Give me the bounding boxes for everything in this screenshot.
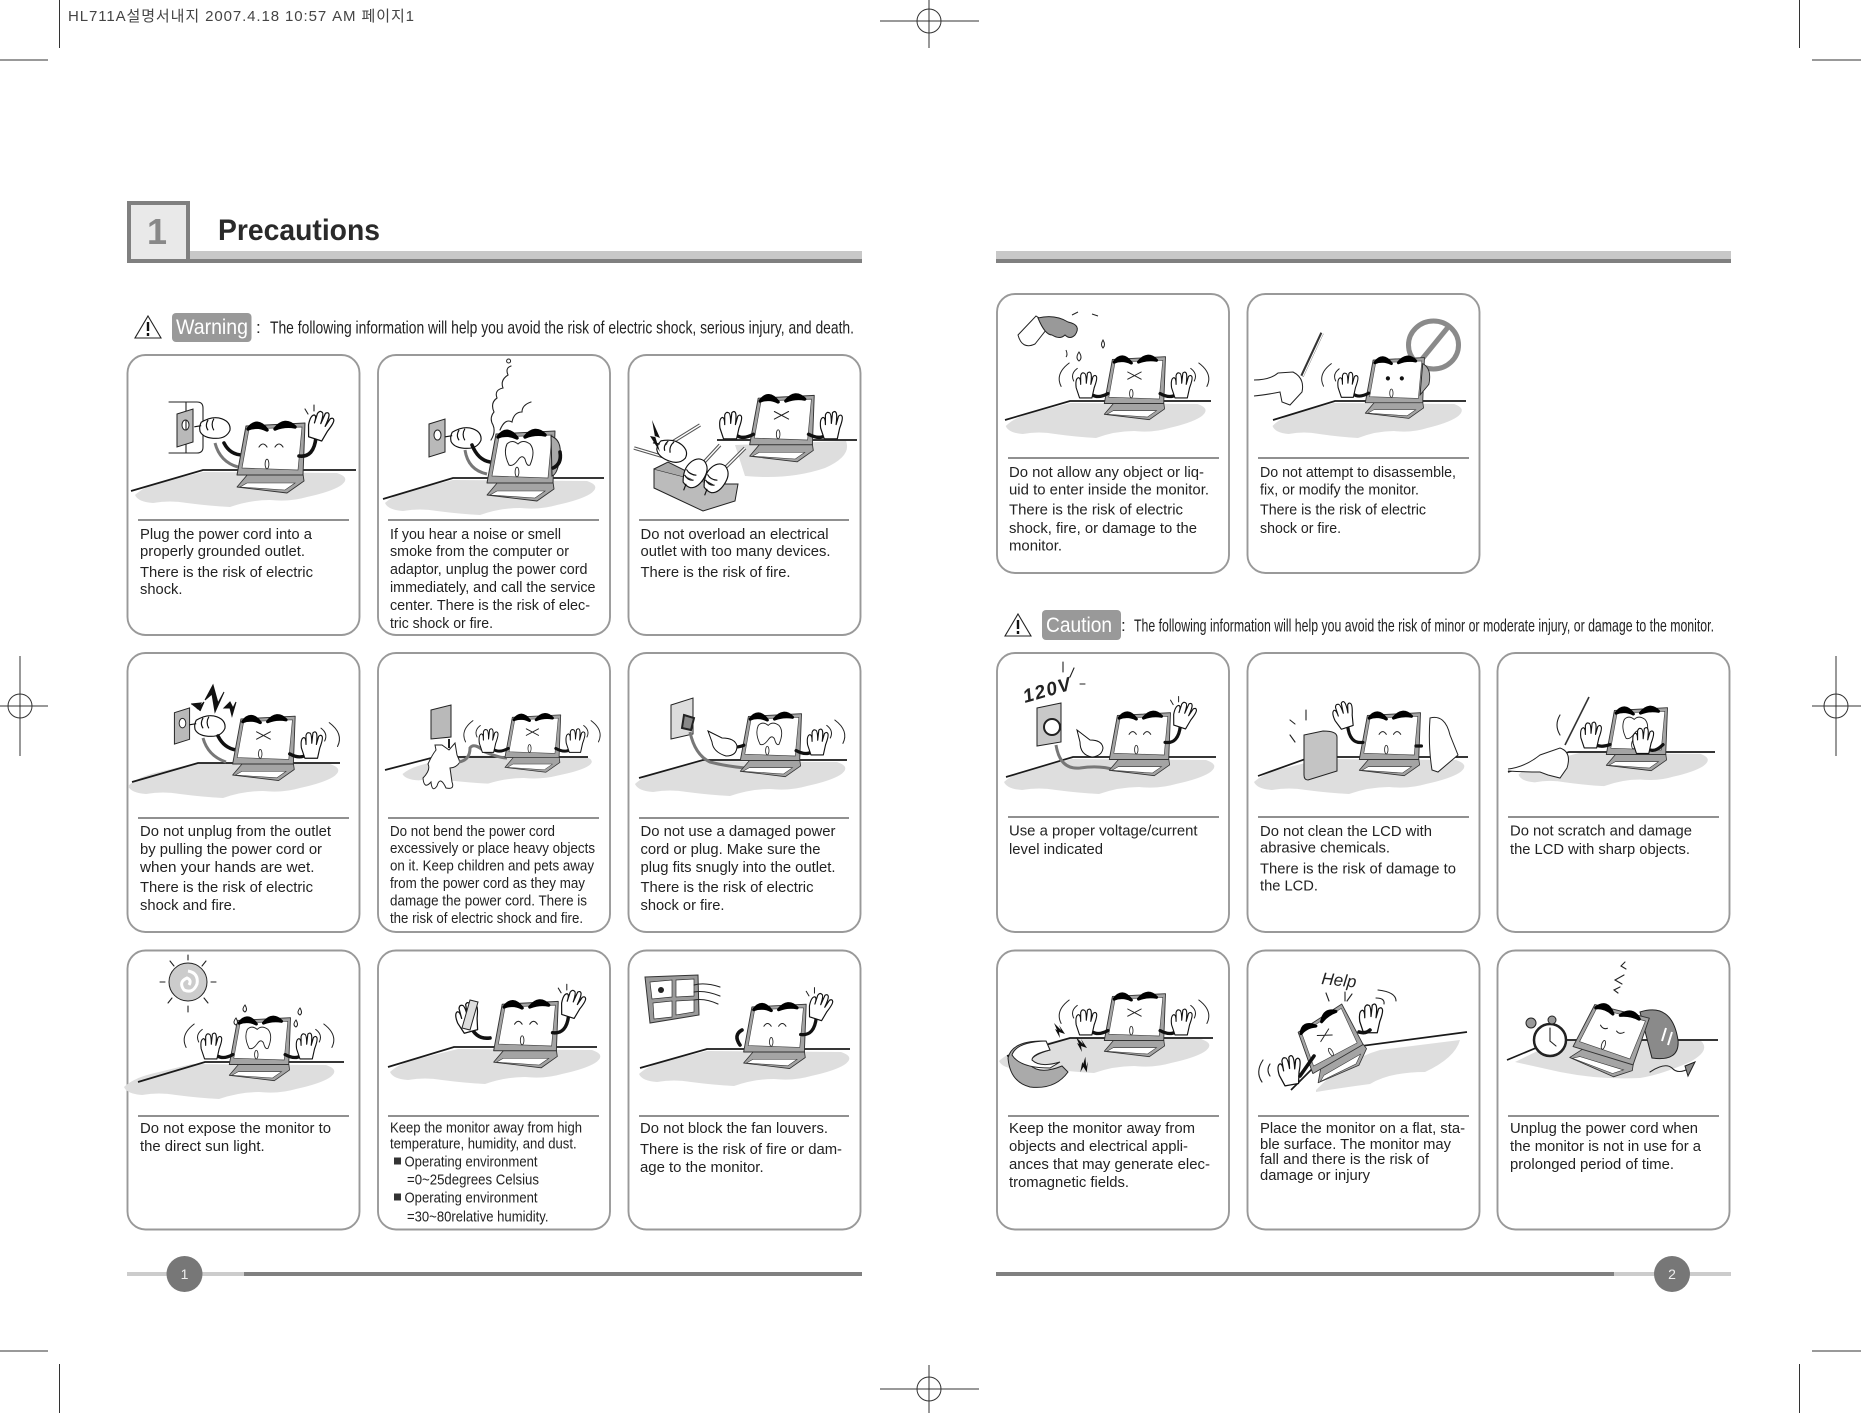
text: fix, or modify the monitor. bbox=[1260, 482, 1419, 498]
text: the direct sun light. bbox=[140, 1139, 265, 1155]
text bbox=[1260, 824, 1456, 894]
illustration: liquid poured on monitor bbox=[1005, 312, 1211, 438]
panel: fan louvers bbox=[628, 950, 860, 1230]
panel: unplug when not in use bbox=[1498, 950, 1730, 1230]
panel: damaged power cord bbox=[628, 653, 860, 932]
text: prolonged period of time. bbox=[1510, 1157, 1674, 1173]
footer right with page number: 2 bbox=[1668, 1266, 1676, 1282]
text: outlet with too many devices. bbox=[640, 544, 830, 560]
text bbox=[1009, 465, 1209, 554]
text: Keep the monitor away from high bbox=[390, 1120, 582, 1136]
icon: vent panel bbox=[645, 975, 720, 1023]
warning banner: : bbox=[256, 318, 261, 337]
illustration: fan louvers and monitor bbox=[639, 975, 850, 1086]
text: excessively or place heavy objects bbox=[390, 841, 595, 857]
illustration: magnet near monitor bbox=[999, 993, 1213, 1087]
illustration: chemical bottle and cloth bbox=[1254, 699, 1468, 794]
text: If you hear a noise or smell bbox=[390, 527, 561, 543]
text: There is the risk of damage to bbox=[1260, 862, 1456, 878]
text: Do not allow any object or liq- bbox=[1009, 465, 1204, 481]
text: cord or plug. Make sure the bbox=[640, 842, 820, 858]
panel: direct sun light bbox=[124, 950, 360, 1230]
text: on it. Keep children and pets away bbox=[390, 859, 595, 875]
illustration: overloaded power strip bbox=[634, 395, 857, 511]
text: objects and electrical appli- bbox=[1009, 1139, 1188, 1155]
text: shock. bbox=[140, 582, 182, 598]
text: There is the risk of electric bbox=[1260, 502, 1427, 518]
panel: sharp objects bbox=[1498, 653, 1730, 932]
icon: sun bbox=[160, 955, 216, 1012]
illustration: monitor plugging in cord bbox=[131, 402, 356, 507]
print slug line: HL711A설명서내지 2007.4.18 10:57 AM 페이지1 bbox=[68, 8, 414, 25]
header rule right bbox=[996, 251, 1731, 263]
text: =30~80relative humidity. bbox=[407, 1210, 548, 1226]
text bbox=[640, 1121, 842, 1176]
text: properly grounded outlet. bbox=[140, 544, 305, 560]
text: when your hands are wet. bbox=[139, 860, 314, 876]
illustration: sharp object aimed at monitor bbox=[1508, 697, 1715, 786]
text bbox=[640, 527, 830, 581]
footer right with page number bbox=[996, 1256, 1731, 1292]
caution banner: : bbox=[1121, 616, 1126, 635]
caution banner bbox=[1005, 610, 1714, 640]
text: ances that may generate elec- bbox=[1009, 1157, 1210, 1173]
warning banner: The following information will help you avoid the risk of electric shock, serious injury, and death. bbox=[270, 318, 854, 338]
text: Do not unplug from the outlet bbox=[140, 824, 331, 840]
panel: plug into grounded outlet bbox=[128, 355, 360, 635]
text: damage or injury bbox=[1260, 1168, 1371, 1184]
text: Do not use a damaged power bbox=[640, 824, 836, 840]
text: Do not block the fan louvers. bbox=[640, 1121, 828, 1137]
text: the risk of electric shock and fire. bbox=[390, 911, 583, 927]
illustration: sleeping monitor and alarm clock bbox=[1507, 962, 1718, 1082]
panel: electromagnetic fields bbox=[997, 950, 1229, 1230]
panel: temperature and humidity bbox=[378, 950, 610, 1230]
panel: proper voltage bbox=[997, 653, 1229, 932]
icon: magnet bbox=[1008, 1041, 1068, 1087]
illustration: screwdriver and prohibition sign bbox=[1254, 321, 1466, 438]
footer left with page number: 1 bbox=[181, 1266, 189, 1282]
text: shock and fire. bbox=[140, 898, 236, 914]
text: There is the risk of electric bbox=[640, 880, 814, 896]
text: damage the power cord. There is bbox=[390, 894, 587, 910]
footer left with page number bbox=[127, 1256, 862, 1292]
text: the monitor is not in use for a bbox=[1510, 1139, 1702, 1155]
text bbox=[390, 1120, 582, 1226]
text bbox=[1260, 1121, 1465, 1184]
illustration: 120V outlet bbox=[1004, 662, 1216, 794]
panel: abrasive chemicals bbox=[1248, 653, 1480, 932]
text: There is the risk of electric bbox=[1009, 502, 1184, 518]
text: center. There is the risk of elec- bbox=[390, 598, 590, 614]
text: Operating environment bbox=[404, 1190, 538, 1206]
text: There is the risk of fire or dam- bbox=[640, 1142, 842, 1158]
text: from the power cord as they may bbox=[390, 876, 586, 892]
text: Do not expose the monitor to bbox=[140, 1121, 331, 1137]
illustration: monitor with smoke bbox=[383, 359, 604, 515]
text: temperature, humidity, and dust. bbox=[390, 1136, 577, 1152]
text bbox=[1510, 824, 1692, 858]
illustration: damaged plug pointed at bbox=[635, 698, 847, 796]
text: shock or fire. bbox=[1260, 521, 1341, 537]
text: Use a proper voltage/current bbox=[1009, 824, 1198, 840]
text bbox=[140, 1121, 331, 1155]
panel: flat stable surface bbox=[1248, 950, 1480, 1230]
text: tric shock or fire. bbox=[390, 616, 493, 632]
text: There is the risk of electric bbox=[140, 880, 314, 896]
text: Place the monitor on a flat, sta- bbox=[1260, 1121, 1465, 1137]
text bbox=[1510, 1121, 1702, 1173]
label: 120V: 120V bbox=[1021, 674, 1075, 708]
panel: do not bend the power cord bbox=[378, 653, 610, 932]
text: =0~25degrees Celsius bbox=[407, 1172, 539, 1188]
text: fall and there is the risk of bbox=[1260, 1152, 1430, 1168]
text: There is the risk of electric bbox=[140, 565, 314, 581]
text: tromagnetic fields. bbox=[1009, 1175, 1129, 1191]
text: Do not attempt to disassemble, bbox=[1260, 465, 1456, 481]
text: adaptor, unplug the power cord bbox=[390, 562, 588, 578]
text bbox=[1009, 1121, 1210, 1191]
panel: overloaded outlet bbox=[628, 355, 860, 635]
warning banner: Warning bbox=[176, 315, 248, 339]
section header left: Precautions bbox=[218, 214, 380, 247]
illustration: monitor with thermometer bbox=[388, 984, 600, 1084]
illustration: sun over monitor bbox=[124, 955, 344, 1099]
text bbox=[1009, 824, 1198, 858]
illustration: cat on power cord bbox=[385, 705, 600, 789]
text: There is the risk of fire. bbox=[640, 565, 790, 581]
text: Do not bend the power cord bbox=[390, 824, 555, 840]
text: age to the monitor. bbox=[640, 1160, 764, 1176]
illustration: tipping monitor, Help bbox=[1259, 969, 1467, 1092]
text: shock or fire. bbox=[640, 898, 724, 914]
text bbox=[139, 824, 331, 914]
text: the LCD. bbox=[1260, 878, 1318, 894]
text: Do not scratch and damage bbox=[1510, 824, 1692, 840]
section header left: 1 bbox=[147, 211, 167, 252]
text: plug fits snugly into the outlet. bbox=[640, 860, 836, 876]
panel: noise or smoke bbox=[378, 355, 610, 635]
text bbox=[390, 527, 596, 632]
text bbox=[1260, 465, 1456, 537]
text: the LCD with sharp objects. bbox=[1510, 842, 1690, 858]
text: abrasive chemicals. bbox=[1260, 840, 1390, 856]
text: ble surface. The monitor may bbox=[1260, 1137, 1452, 1153]
text: Do not overload an electrical bbox=[640, 527, 828, 543]
panel: do not unplug with wet hands bbox=[128, 653, 360, 932]
warning banner bbox=[135, 313, 854, 342]
panel: foreign objects and liquid bbox=[997, 294, 1229, 573]
illustration: tipping monitor, Help: Help bbox=[1321, 969, 1357, 992]
caution banner: Caution bbox=[1046, 613, 1112, 637]
text bbox=[390, 824, 595, 927]
text: smoke from the computer or bbox=[390, 544, 569, 560]
text: Do not clean the LCD with bbox=[1260, 824, 1432, 840]
text: level indicated bbox=[1009, 842, 1103, 858]
text: uid to enter inside the monitor. bbox=[1009, 482, 1209, 498]
text: Plug the power cord into a bbox=[140, 527, 313, 543]
text: Keep the monitor away from bbox=[1009, 1121, 1195, 1137]
panel: do not disassemble bbox=[1248, 294, 1480, 573]
text: Operating environment bbox=[404, 1154, 538, 1170]
icon: prohibition sign bbox=[1408, 321, 1458, 369]
text: monitor. bbox=[1009, 538, 1062, 554]
text: by pulling the power cord or bbox=[140, 842, 322, 858]
section header left bbox=[129, 203, 862, 263]
illustration: electric shock from plug bbox=[128, 685, 340, 798]
text: shock, fire, or damage to the bbox=[1009, 521, 1197, 537]
text bbox=[640, 824, 836, 914]
text: Unplug the power cord when bbox=[1510, 1121, 1698, 1137]
text bbox=[140, 527, 314, 598]
text: immediately, and call the service bbox=[390, 580, 596, 596]
